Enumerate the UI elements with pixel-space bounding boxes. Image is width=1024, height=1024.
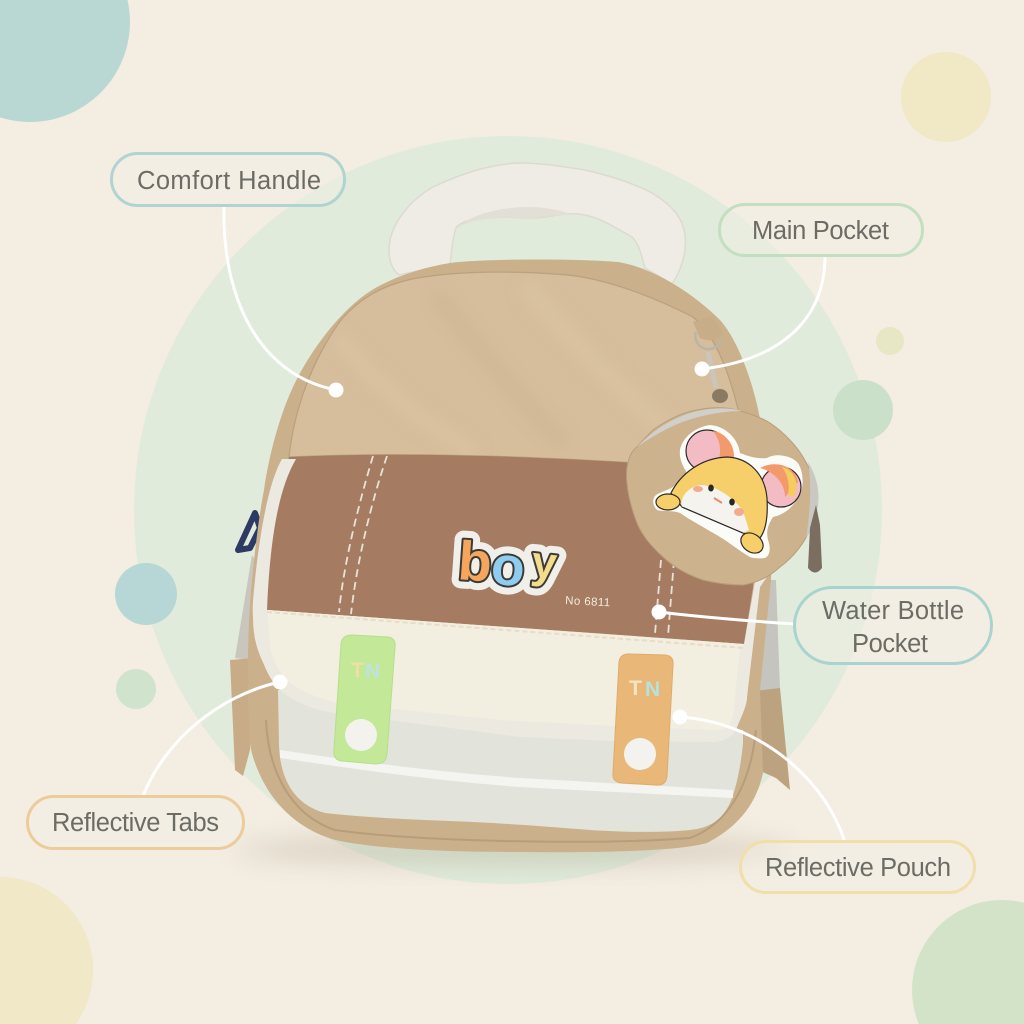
connector lines bbox=[143, 207, 844, 840]
label: Reflective Pouch: Reflective Pouch bbox=[765, 854, 951, 882]
upper panel bbox=[289, 272, 750, 470]
label: Water Bottle Pocket: Water Bottle bbox=[822, 597, 964, 625]
mouse chin line bbox=[682, 507, 743, 533]
label: Comfort Handle bbox=[112, 154, 344, 206]
connector: comfort handle bbox=[224, 207, 344, 398]
backpack bbox=[230, 163, 822, 866]
tab: green bbox=[334, 635, 395, 764]
tab: orange: T bbox=[629, 677, 642, 700]
connector: reflective pouch bbox=[672, 710, 844, 840]
flap trim bbox=[253, 459, 767, 742]
connector: main pocket bbox=[694, 256, 825, 376]
mouse paws bbox=[656, 494, 680, 510]
mouse head bbox=[671, 457, 767, 538]
right mesh pocket bbox=[755, 580, 780, 692]
lower pocket bbox=[278, 690, 743, 832]
tab: orange bbox=[613, 654, 673, 785]
body piping bbox=[266, 720, 756, 842]
ground shadow bbox=[235, 834, 795, 866]
flap stitch line bbox=[267, 612, 744, 648]
icon: side strap buckle bbox=[238, 513, 260, 550]
boy logo: y bbox=[529, 536, 559, 589]
connector: reflective tabs bbox=[143, 674, 288, 796]
tab: green: N bbox=[365, 660, 380, 683]
boy logo bbox=[456, 529, 559, 598]
keyring bbox=[693, 316, 728, 403]
tab: orange: N bbox=[645, 678, 660, 701]
label: Water Bottle Pocket: Pocket bbox=[852, 630, 928, 658]
mouse features bbox=[708, 484, 714, 492]
label: Comfort Handle: Comfort Handle bbox=[137, 167, 321, 195]
boy logo: y bbox=[529, 536, 559, 589]
mouse face bbox=[681, 485, 749, 533]
boy logo: b bbox=[456, 529, 494, 593]
fabric folds bbox=[462, 455, 472, 456]
pouch zipper pull bbox=[808, 505, 822, 572]
handle bbox=[389, 163, 685, 284]
label: Water Bottle Pocket bbox=[794, 588, 992, 664]
mouse sticker bbox=[653, 425, 803, 558]
pouch side zipper bbox=[806, 462, 819, 538]
boy logo: o bbox=[489, 534, 528, 598]
tab: green: T bbox=[351, 659, 364, 682]
brown band bbox=[267, 455, 756, 644]
flap edge bbox=[257, 610, 752, 742]
pouch zipper band bbox=[637, 408, 742, 447]
label: Reflective Tabs bbox=[28, 796, 244, 848]
boy logo: b bbox=[456, 529, 494, 593]
cream flap bbox=[267, 610, 744, 730]
left side pocket bbox=[230, 658, 254, 776]
label: Reflective Pouch bbox=[740, 842, 974, 892]
boy logo: o bbox=[489, 534, 528, 598]
left mesh pocket bbox=[235, 555, 262, 660]
coin pouch bbox=[627, 408, 822, 585]
label: Main Pocket bbox=[720, 204, 922, 256]
reflective strip bbox=[280, 750, 733, 798]
connector: water bottle pocket bbox=[652, 604, 794, 624]
label: Reflective Tabs: Reflective Tabs bbox=[52, 809, 219, 837]
model number: No 6811 bbox=[565, 595, 611, 609]
bag body bbox=[248, 259, 772, 852]
stitching bbox=[339, 456, 674, 636]
label: Main Pocket: Main Pocket bbox=[752, 217, 889, 245]
right side pocket bbox=[755, 688, 790, 790]
